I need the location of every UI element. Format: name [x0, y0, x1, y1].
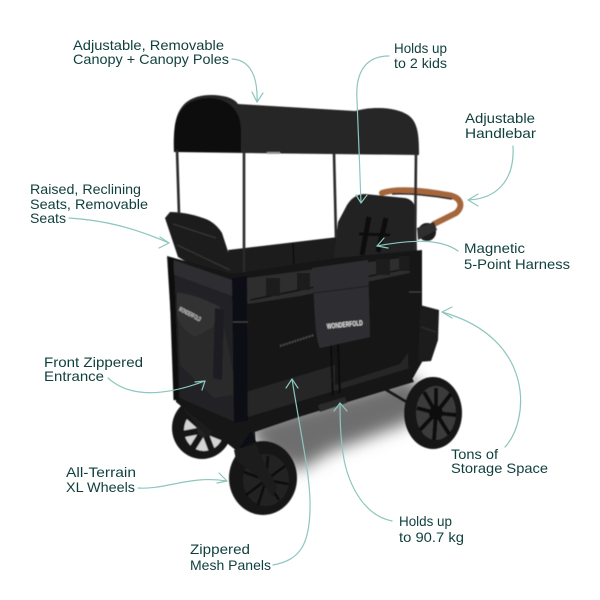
label: harness	[464, 240, 570, 272]
label: storage: Tons of	[451, 446, 498, 462]
label: storage: Storage Space	[451, 460, 548, 476]
front post	[232, 276, 414, 452]
arrow: canopy	[232, 59, 263, 102]
label: entrance: Front Zippered	[44, 354, 143, 370]
wagon side panel	[168, 258, 235, 422]
arrow: seats	[69, 218, 169, 248]
ground shadow	[245, 375, 430, 470]
label: holds 90.7 kg: Holds up	[399, 513, 452, 529]
label: canopy	[73, 37, 229, 67]
label: seats: Raised, Reclining	[30, 181, 141, 197]
handlebar	[382, 190, 460, 241]
label: holds 2 kids: to 2 kids	[394, 55, 447, 71]
label: holds 2 kids: Holds up	[394, 40, 447, 56]
label: canopy: Adjustable, Removable	[73, 37, 224, 53]
rear seat	[333, 194, 417, 265]
canopy poles	[177, 150, 416, 278]
storage bag	[418, 305, 439, 362]
rear right wheel	[404, 377, 462, 449]
front wheel	[229, 441, 297, 515]
label: holds 90.7 kg: to 90.7 kg	[399, 529, 464, 545]
logo: flap: WONDERFOLD	[326, 318, 363, 331]
arrow: handlebar	[468, 146, 513, 206]
arrow: wheels	[138, 473, 227, 488]
wagon illustration	[165, 95, 462, 515]
label: wheels: All-Terrain	[66, 464, 136, 480]
label: seats: Seats, Removable	[30, 196, 148, 212]
label: handlebar: Adjustable	[465, 110, 535, 126]
wagon body silhouette	[167, 250, 422, 452]
label: mesh panels	[190, 541, 271, 573]
canopy	[174, 95, 419, 155]
label: harness: Magnetic	[464, 240, 525, 256]
arrow: storage	[442, 307, 521, 447]
label: holds 2 kids	[394, 40, 447, 71]
label: handlebar: Handlebar	[465, 125, 536, 141]
label: wheels	[66, 464, 136, 495]
front seat	[165, 212, 236, 276]
right post	[408, 254, 422, 368]
back interior fabric	[228, 237, 340, 282]
arrow: holds 90.7 kg	[334, 403, 392, 521]
arrow: harness	[377, 238, 458, 251]
label: entrance: Entrance	[44, 368, 104, 384]
label: storage	[451, 446, 548, 476]
label: mesh panels: Zippered	[190, 541, 250, 557]
label: seats	[30, 181, 148, 226]
arrow: entrance	[108, 378, 205, 393]
label: wheels: XL Wheels	[66, 479, 135, 495]
center flap	[312, 260, 370, 348]
rear left wheel	[172, 397, 232, 459]
label: holds 90.7 kg	[399, 513, 464, 545]
logo: pouch: WONDERFOLD	[177, 306, 202, 323]
label: canopy: Canopy + Canopy Poles	[73, 51, 229, 67]
label: mesh panels: Mesh Panels	[190, 557, 271, 573]
label: handlebar	[465, 110, 536, 141]
arrow: holds 2 kids	[356, 56, 389, 203]
side pouch	[177, 293, 233, 398]
axle brace	[378, 385, 410, 404]
arrow: mesh panels	[273, 379, 310, 565]
label: harness: 5-Point Harness	[464, 256, 570, 272]
label: seats: Seats	[30, 210, 66, 226]
top rim	[232, 256, 416, 304]
front mesh panel	[238, 262, 414, 420]
label: entrance	[44, 354, 143, 384]
